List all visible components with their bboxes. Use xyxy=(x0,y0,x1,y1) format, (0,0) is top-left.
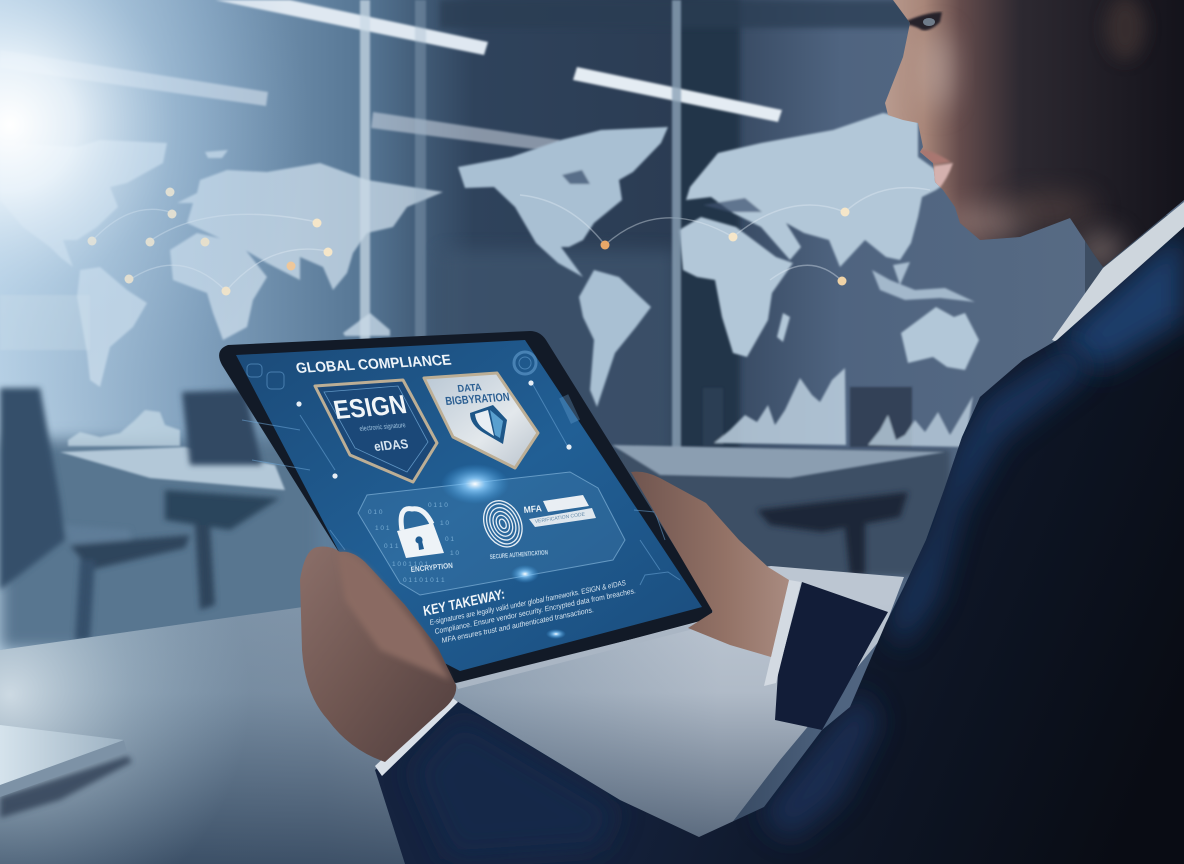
badge small print: electronic signature xyxy=(359,421,406,433)
verification field xyxy=(529,508,596,527)
heading: Key Takeaway: KEY TAKEWAY: xyxy=(422,585,506,619)
glass partition posts xyxy=(360,0,681,460)
badge label: Data: DATA xyxy=(457,382,482,395)
label: encryption: ENCRYPTION xyxy=(410,561,453,574)
icon: fingerprint xyxy=(476,494,529,553)
takeaway body text: MFA ensures trust and authenticated transactions. xyxy=(441,605,594,645)
closed laptop on table xyxy=(0,725,132,818)
world map: centre reflection xyxy=(458,127,668,407)
badge label: eIDAS: eIDAS xyxy=(373,436,410,454)
lips xyxy=(920,149,953,190)
ear xyxy=(1105,0,1145,60)
binary digits: 0 1 1 xyxy=(384,543,399,550)
back desks xyxy=(60,445,945,490)
office chairs and monitor xyxy=(0,388,908,640)
tablet screen xyxy=(236,340,702,671)
binary digits: 1 0 xyxy=(450,550,459,557)
binary digits: 0 1 xyxy=(445,536,454,543)
far arm sleeve and cuff xyxy=(764,580,888,730)
badge label: ESIGN: ESIGN xyxy=(331,389,409,425)
far hand xyxy=(631,472,789,657)
heading: Global Compliance: GLOBAL COMPLIANCE xyxy=(295,353,453,377)
circuit decoration xyxy=(242,352,680,585)
person: navy suit jacket xyxy=(375,227,1184,864)
binary digits: 0 1 1 0 xyxy=(428,502,448,509)
person: face and neck xyxy=(880,0,1184,280)
binary digits: 1 0 1 xyxy=(375,525,390,532)
binary digits: 1 0 xyxy=(440,520,449,527)
near arm shirt cuff xyxy=(375,696,458,776)
badge label: Integration: BIGBYRATION xyxy=(445,392,510,408)
tablet silver edge xyxy=(456,619,713,689)
badge: ESIGN shield xyxy=(315,380,437,482)
world map: right reflection xyxy=(679,113,979,370)
label: secure authentication: SECURE AUTHENTICATION xyxy=(490,549,548,561)
near hand xyxy=(300,547,456,762)
person: white collar xyxy=(1052,202,1184,342)
tablet xyxy=(219,331,713,689)
network arcs and location dots xyxy=(88,188,930,296)
binary digits: 0 1 1 0 1 0 1 1 xyxy=(403,577,445,584)
front table xyxy=(0,566,904,864)
light sparks xyxy=(441,464,566,639)
tablet body xyxy=(219,331,712,683)
near hand thumb highlight xyxy=(337,552,450,680)
takeaway body text: E-signatures are legally valid under global frameworks. ESIGN & eIDAS xyxy=(429,578,626,627)
eye xyxy=(900,12,942,30)
badge: data protection shield xyxy=(424,373,538,468)
label: MFA: MFA xyxy=(523,503,543,515)
verification field: VERIFICATION CODE xyxy=(535,511,586,525)
world map: left reflection xyxy=(0,140,443,387)
security panel xyxy=(358,472,625,595)
bright window glow xyxy=(0,0,560,560)
binary digits: 0 1 0 xyxy=(368,509,383,516)
icon: padlock xyxy=(397,509,444,558)
ceiling lights xyxy=(0,0,782,152)
binary digits: 1 0 0 1 1 0 1 xyxy=(392,561,429,568)
takeaway body text: Compliance. Ensure vendor security. Encrypted data from breaches. xyxy=(434,586,636,636)
reflected bar charts xyxy=(0,295,973,447)
MFA input field xyxy=(543,495,589,512)
icon: small shield xyxy=(470,405,507,444)
